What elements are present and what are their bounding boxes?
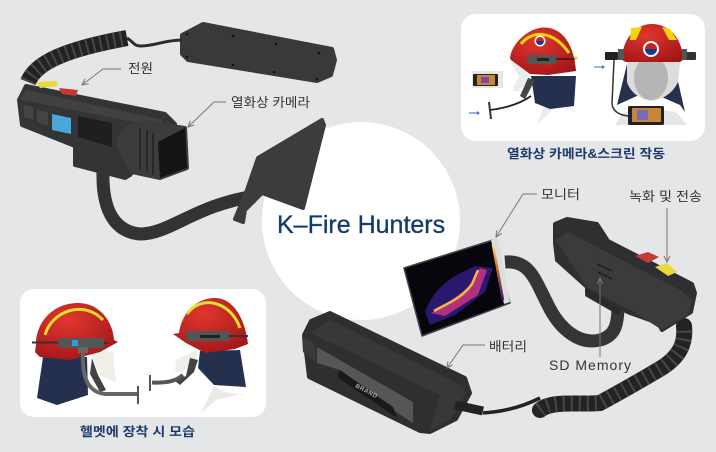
- label: SD memory: SD Memory: [549, 357, 631, 373]
- device: bottom-right unit: [302, 219, 695, 432]
- label: thermal camera: 열화상 카메라: [231, 95, 310, 110]
- camera body rear: [555, 219, 695, 330]
- label: monitor: [496, 187, 580, 237]
- coiled cable: [483, 326, 684, 413]
- label: record and transmit: [629, 189, 702, 262]
- icon: helmet left view with device: [32, 303, 138, 405]
- camera body: [19, 86, 175, 178]
- panel: mounted on helmet: [20, 289, 266, 417]
- white centre circle: [262, 122, 460, 320]
- buttons: [24, 81, 112, 147]
- icon: helmet side view with device: [469, 27, 578, 125]
- icon: blue arrow: [469, 112, 479, 114]
- thermal monitor: [404, 238, 510, 336]
- title: K-Fire Hunters: K–Fire Hunters: [277, 211, 445, 239]
- battery: [302, 313, 483, 432]
- label: power: 전원: [128, 61, 153, 76]
- label: thermal camera: [188, 95, 310, 127]
- device: top-left thermal camera unit: [19, 24, 335, 234]
- thermal lens: [118, 123, 187, 178]
- caption: mounted on helmet: 헬멧에 장착 시 모습: [80, 424, 195, 439]
- panel: thermal camera and screen operation: [461, 14, 705, 141]
- icon: helmet right view with device: [150, 298, 248, 413]
- label: battery: [447, 339, 527, 368]
- label: record and transmit: 녹화 및 전송: [629, 189, 702, 204]
- label: power: [82, 61, 153, 85]
- caption: thermal camera and screen operation: 열화상 카메라&스크린 작동: [507, 146, 665, 161]
- icon: helmet front view with display: [594, 24, 696, 125]
- icon: blue arrow: [594, 66, 604, 68]
- battery brand: BRAND: [354, 383, 378, 400]
- label: SD memory: [549, 278, 631, 373]
- label: monitor: 모니터: [541, 187, 580, 202]
- battery back: [182, 24, 335, 81]
- display shield: [235, 120, 324, 222]
- gooseneck arm: [103, 172, 255, 234]
- label: battery: 배터리: [489, 339, 527, 354]
- icon: small thermal display: [472, 71, 503, 88]
- gooseneck arm: [505, 262, 618, 341]
- coiled cable: [28, 38, 182, 82]
